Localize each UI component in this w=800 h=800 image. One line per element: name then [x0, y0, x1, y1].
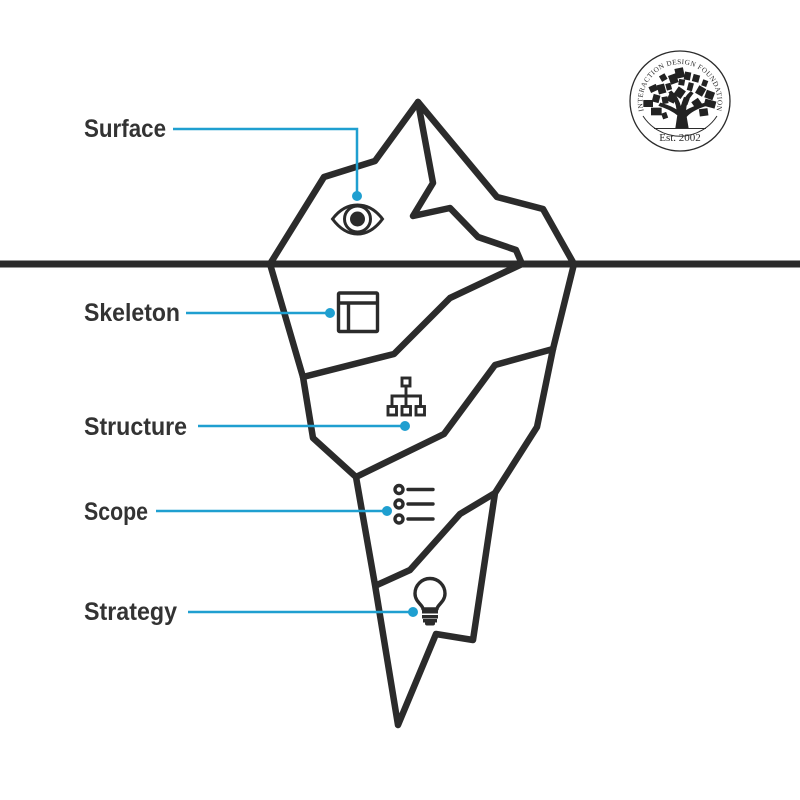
label: Strategy with leader: Strategy: [84, 598, 177, 626]
label: Scope with leader: [84, 498, 392, 526]
label: Skeleton with leader: Skeleton: [84, 299, 180, 327]
logo: Interaction Design Foundation: [629, 50, 731, 152]
logo date: Est. 2002: [659, 132, 701, 144]
label: Scope with leader: Scope: [84, 498, 148, 526]
iceberg outline: [270, 102, 574, 725]
logo ring text: INTERACTION DESIGN FOUNDATION: [638, 59, 722, 112]
icon: eye: [332, 205, 382, 234]
label: Strategy with leader: [84, 598, 418, 626]
label: Skeleton with leader: [84, 299, 335, 327]
label: Structure with leader: Structure: [84, 413, 187, 441]
label: Surface with leader: [84, 115, 362, 201]
icon: light bulb: [415, 579, 445, 626]
icon: checklist: [395, 486, 433, 523]
label: Structure with leader: [84, 413, 410, 441]
icon: sitemap: [388, 378, 424, 415]
icon: wireframe layout: [338, 293, 378, 332]
waterline: [0, 260, 800, 268]
logo tree: [644, 68, 716, 128]
label: Surface with leader: Surface: [84, 115, 166, 143]
